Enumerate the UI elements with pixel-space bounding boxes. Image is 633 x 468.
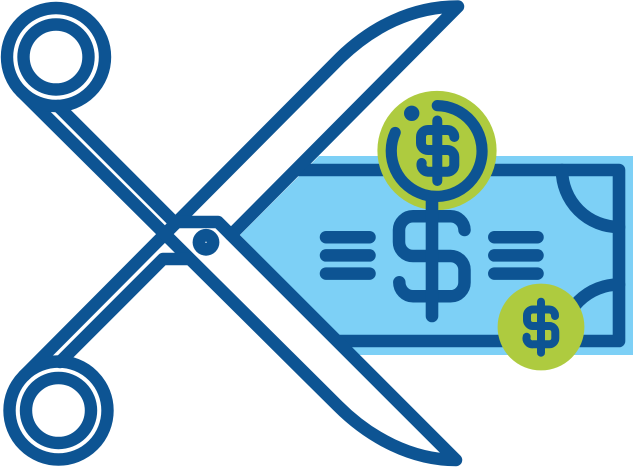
small green coin xyxy=(498,284,584,370)
large dollar sign curve xyxy=(399,216,465,296)
coin ring arc xyxy=(391,106,482,196)
bill outline xyxy=(300,170,619,341)
bill corner arc: bottom right xyxy=(562,284,619,341)
coin disc xyxy=(498,284,584,370)
large green coin xyxy=(377,91,497,316)
upper blade with lower-left handle xyxy=(24,6,458,376)
dollar bill xyxy=(240,156,633,355)
coin dollar sign xyxy=(526,302,555,353)
lower blade with upper-left handle xyxy=(21,92,456,460)
coin dot xyxy=(404,106,419,121)
pivot screw xyxy=(193,229,219,256)
scissors xyxy=(7,6,458,460)
coin dollar sign xyxy=(421,120,454,181)
right text bars xyxy=(494,237,538,274)
coin disc xyxy=(377,91,497,210)
lower-left handle inner band xyxy=(60,259,188,362)
stem linking coin to bill dollar sign xyxy=(426,200,438,316)
left text bars xyxy=(326,237,370,274)
bill corner arc: top right xyxy=(562,170,619,227)
top finger ring xyxy=(7,8,105,106)
bottom finger ring xyxy=(10,362,108,460)
bill background xyxy=(240,156,633,355)
